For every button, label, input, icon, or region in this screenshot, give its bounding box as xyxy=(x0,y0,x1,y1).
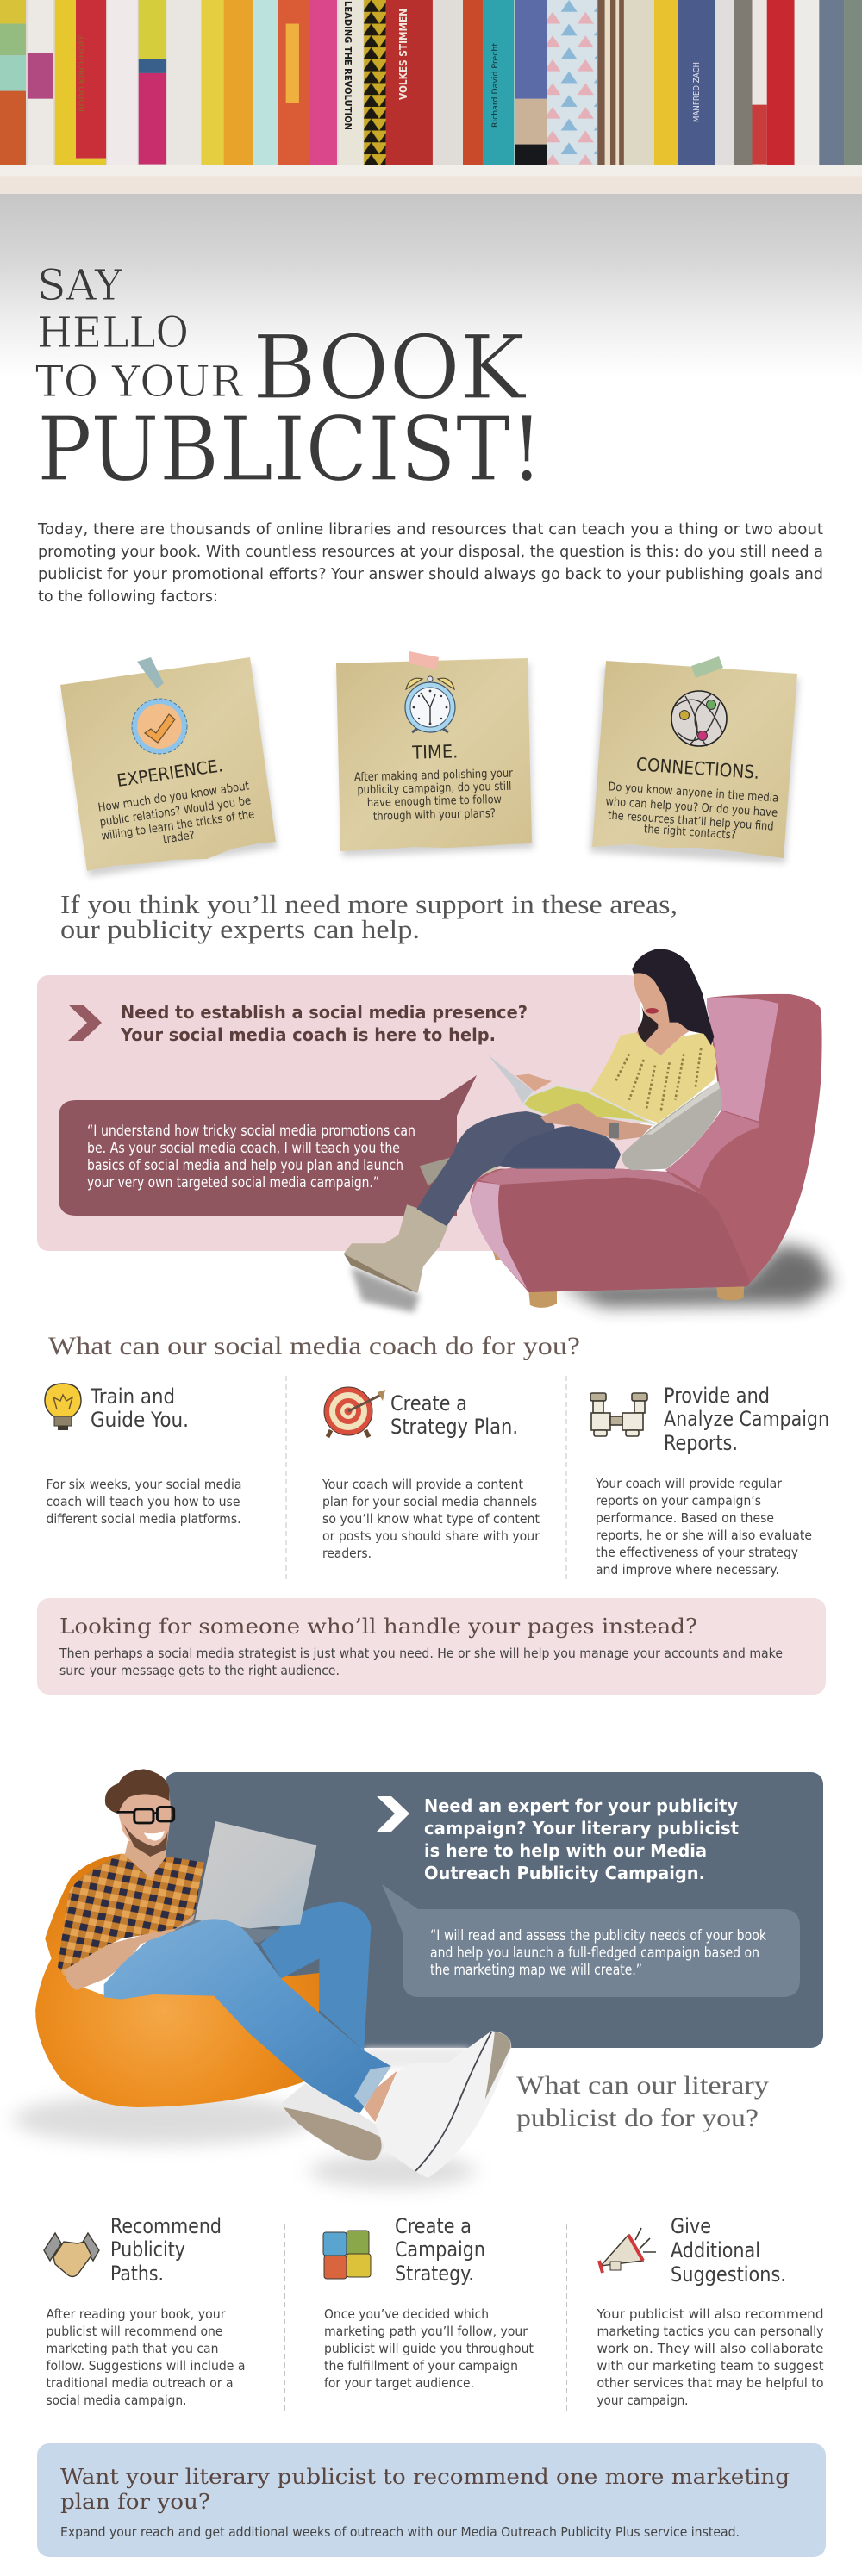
body: Your coach will provide a content xyxy=(322,1477,523,1492)
coach heading: Your social media coach is here to help. xyxy=(120,1024,496,1045)
bookshelf photo banner: MANFRED ZACH xyxy=(692,62,702,122)
time text xyxy=(354,741,513,824)
section heading: literary publicist: publicist do for you? xyxy=(516,2104,759,2132)
bubble quote: the marketing map we will create.” xyxy=(430,1962,642,1978)
bookshelf photo banner xyxy=(0,0,862,194)
item: create a strategy plan xyxy=(322,1387,540,1561)
chair body xyxy=(470,994,822,1292)
connections text: Do you know anyone in the media xyxy=(608,780,779,806)
heading xyxy=(671,2214,786,2287)
bubble quote: your very own targeted social media campaign.” xyxy=(87,1174,379,1191)
bubble quote xyxy=(87,1123,415,1191)
heading: Additional xyxy=(671,2238,760,2262)
title xyxy=(35,260,543,501)
chevron icon xyxy=(68,1005,102,1041)
body: publicist will guide you throughout xyxy=(324,2341,534,2356)
callout: social media strategist: sure your message gets to the right audience. xyxy=(59,1663,340,1678)
heading: Suggestions. xyxy=(671,2262,786,2287)
time text: publicity campaign, do you still xyxy=(357,780,512,797)
item: train and guide xyxy=(45,1384,241,1527)
body: publicist will recommend one xyxy=(47,2324,222,2339)
neck xyxy=(636,1017,690,1055)
bookshelf photo banner: BODO KIRCHHOFF xyxy=(78,34,87,112)
chair feet xyxy=(493,1251,502,1260)
heading xyxy=(110,2214,222,2286)
jeans xyxy=(416,1111,621,1226)
heading xyxy=(390,1391,518,1439)
body: so you’ll know what type of content xyxy=(322,1511,540,1527)
speech bubble xyxy=(382,1884,800,1997)
body: After reading your book, your xyxy=(47,2306,226,2322)
body: the effectiveness of your strategy xyxy=(596,1545,798,1560)
floor shadows xyxy=(13,2094,313,2145)
heading: Recommend xyxy=(110,2214,222,2238)
boot xyxy=(344,1204,448,1293)
experience text: willing to learn the tricks of the xyxy=(101,807,255,843)
heading: Train and xyxy=(90,1384,175,1409)
icon: light bulb xyxy=(45,1384,81,1430)
tape: blue xyxy=(137,657,164,688)
speech bubble xyxy=(59,1075,477,1216)
far leg xyxy=(260,1902,371,2050)
bubble quote: basics of social media and help you plan and launch xyxy=(87,1157,403,1173)
experience text: public relations? Would you be xyxy=(99,793,252,830)
far shoe xyxy=(281,2083,384,2161)
body xyxy=(597,2306,824,2408)
beanbag xyxy=(35,1854,319,2107)
title: SAY xyxy=(37,260,123,310)
body: marketing path that you can xyxy=(47,2341,219,2356)
body: readers. xyxy=(322,1546,372,1561)
time text: TIME. xyxy=(411,741,459,763)
coach heading xyxy=(120,1002,528,1045)
far boot xyxy=(420,1157,451,1186)
section heading: social media coach: What can our social media coach do for you? xyxy=(48,1332,580,1360)
heading: Create a xyxy=(390,1391,467,1416)
heading: Paths. xyxy=(110,2262,164,2286)
body: reports, he or she will also evaluate xyxy=(596,1528,812,1543)
heading: Reports. xyxy=(664,1431,738,1455)
intro paragraph: promoting your book. With countless resources at your disposal, the question is this: do you still need a xyxy=(38,544,823,561)
experience text xyxy=(97,755,255,847)
publicist heading: is here to help with our Media xyxy=(424,1840,707,1861)
body xyxy=(47,1477,241,1527)
callout: media outreach publicity plus xyxy=(37,2443,826,2557)
intro paragraph: publicist for your promotional efforts? Your answer should always go back to your publishing goals and xyxy=(38,566,823,583)
column dividers xyxy=(284,1376,567,2414)
body: or posts you should share with your xyxy=(322,1528,540,1544)
body: For six weeks, your social media xyxy=(47,1477,241,1492)
body: Your coach will provide regular xyxy=(595,1476,783,1491)
body: Your publicist will also recommend xyxy=(597,2306,824,2322)
body: other services that may be helpful to xyxy=(597,2375,824,2391)
body: reports on your campaign’s xyxy=(596,1493,761,1509)
support statement: our publicity experts can help. xyxy=(60,914,420,944)
pillow xyxy=(622,1081,722,1170)
callout: social media strategist: Then perhaps a social media strategist is just what you need. He or she will help you manage your accounts and make xyxy=(59,1646,783,1661)
illustration: woman reading on pink armchair xyxy=(344,949,834,1312)
section heading: literary publicist xyxy=(516,2071,769,2132)
item: recommend publicity paths xyxy=(44,2214,245,2408)
callout: media outreach publicity plus: Want your literary publicist to recommend one more marketing xyxy=(60,2465,790,2489)
icon: handshake xyxy=(44,2233,99,2276)
heading: Strategy. xyxy=(395,2262,474,2286)
title: HELLO xyxy=(37,308,189,358)
heading: Guide You. xyxy=(91,1408,189,1432)
body: performance. Based on these xyxy=(596,1510,774,1526)
sweater xyxy=(590,1032,717,1123)
arm xyxy=(64,1914,195,1990)
heading: Analyze Campaign xyxy=(664,1407,829,1431)
item: provide and analyze campaign reports xyxy=(590,1384,829,1577)
body: Once you’ve decided which xyxy=(324,2306,489,2322)
body: for your target audience. xyxy=(324,2375,474,2391)
bubble quote: “I will read and assess the publicity needs of your book xyxy=(430,1927,766,1944)
body xyxy=(324,2306,534,2391)
heading: Publicity xyxy=(110,2237,185,2262)
body: with our marketing team to suggest xyxy=(597,2358,824,2374)
body: and improve where necessary. xyxy=(596,1562,779,1577)
bubble quote xyxy=(430,1927,766,1978)
heading: Provide and xyxy=(664,1384,770,1408)
body: work on. They will also collaborate xyxy=(597,2341,824,2356)
section heading: literary publicist: What can our literary xyxy=(516,2071,769,2100)
note: time xyxy=(336,651,534,856)
heading: Create a xyxy=(395,2214,472,2238)
item: create a campaign strategy xyxy=(323,2214,534,2391)
face xyxy=(634,965,670,1024)
body: coach will teach you how to use xyxy=(47,1494,240,1509)
heading xyxy=(395,2214,485,2286)
callout: media outreach publicity plus: Expand your reach and get additional weeks of outreach with our Media Outreach Publicity Plus service instead. xyxy=(60,2524,740,2540)
body: different social media platforms. xyxy=(47,1511,241,1527)
body: the fulfillment of your campaign xyxy=(324,2358,518,2374)
publicist heading: campaign? Your literary publicist xyxy=(424,1818,739,1839)
neck xyxy=(125,1841,166,1878)
body: plan for your social media channels xyxy=(322,1494,537,1509)
item: give additional suggestions xyxy=(597,2214,824,2408)
heading: Campaign xyxy=(395,2237,485,2262)
body: your campaign. xyxy=(597,2392,688,2408)
icon: check badge xyxy=(132,699,187,754)
hand and wrist xyxy=(540,1103,653,1140)
experience text: How much do you know about xyxy=(97,779,250,815)
intro paragraph: Today, there are thousands of online libraries and resources that can teach you a thing or two about xyxy=(37,521,823,538)
title: BOOK xyxy=(253,317,527,420)
icon: puzzle xyxy=(323,2231,371,2279)
time text: have enough time to follow xyxy=(367,793,502,810)
intro paragraph xyxy=(37,521,823,606)
experience text: trade? xyxy=(162,828,196,847)
magazine xyxy=(488,1055,533,1104)
heading xyxy=(664,1384,829,1455)
laptop xyxy=(195,1821,316,1928)
time text: After making and polishing your xyxy=(354,767,513,784)
bubble quote: and help you launch a full-fledged campaign based on xyxy=(430,1944,759,1961)
body: traditional media outreach or a xyxy=(47,2375,233,2391)
intro paragraph: to the following factors: xyxy=(38,588,218,606)
connections text: the right contacts? xyxy=(643,822,736,843)
support statement xyxy=(60,889,678,944)
connections text: who can help you? Or do you have xyxy=(605,794,778,820)
connections text: CONNECTIONS. xyxy=(635,754,760,783)
panel: literary publicist xyxy=(165,1772,823,2048)
near leg xyxy=(104,1919,391,2117)
body: follow. Suggestions will include a xyxy=(47,2358,245,2374)
body: marketing path you’ll follow, your xyxy=(324,2324,528,2339)
bubble quote: “I understand how tricky social media promotions can xyxy=(87,1123,415,1139)
near shoe xyxy=(375,2031,511,2178)
time text: through with your plans? xyxy=(373,806,496,824)
illustration: man with laptop on orange beanbag xyxy=(13,1769,511,2188)
icon: megaphone xyxy=(599,2228,656,2273)
experience text: EXPERIENCE. xyxy=(116,755,224,791)
head xyxy=(118,1790,171,1857)
wall background gradient xyxy=(0,194,862,379)
icon: alarm clock xyxy=(405,676,455,732)
chevron icon xyxy=(377,1796,409,1832)
chair shadow xyxy=(558,1243,834,1307)
note: connections xyxy=(590,656,799,863)
icon: binoculars xyxy=(590,1393,647,1436)
title: TO YOUR xyxy=(35,357,243,407)
title: PUBLICIST! xyxy=(37,398,543,501)
bubble quote: be. As your social media coach, I will teach you the xyxy=(87,1140,400,1156)
panel: social media coach xyxy=(37,975,640,1251)
icon: network globe xyxy=(671,691,727,746)
publicist heading: Need an expert for your publicity xyxy=(424,1795,738,1816)
body: social media campaign. xyxy=(47,2392,186,2408)
body: marketing tactics you can personally xyxy=(597,2324,824,2339)
callout: social media strategist xyxy=(37,1598,826,1695)
body xyxy=(595,1476,812,1577)
callout: social media strategist: Looking for someone who’ll handle your pages instead? xyxy=(59,1615,697,1639)
coach heading: Need to establish a social media presence? xyxy=(121,1002,528,1023)
note: experience xyxy=(60,657,278,877)
connections text: the resources that’ll help you find xyxy=(607,808,774,834)
connections text xyxy=(605,754,779,843)
heading: Strategy Plan. xyxy=(390,1415,518,1439)
shirt xyxy=(58,1854,204,1984)
icon: target with arrow xyxy=(324,1387,385,1437)
body xyxy=(47,2306,245,2408)
heading xyxy=(90,1384,189,1432)
heading: Give xyxy=(671,2214,711,2238)
support statement: If you think you’ll need more support in these areas, xyxy=(60,889,678,919)
bookshelf photo banner: Richard David Precht xyxy=(491,43,500,128)
publicist heading: Outreach Publicity Campaign. xyxy=(424,1863,705,1883)
callout: media outreach publicity plus: plan for you? xyxy=(60,2490,210,2514)
bookshelf photo banner: LEADING THE REVOLUTION xyxy=(342,1,353,130)
tape: green xyxy=(691,656,723,678)
body xyxy=(322,1477,540,1561)
hair xyxy=(632,949,714,1045)
publicist heading xyxy=(424,1795,739,1883)
tape: pink xyxy=(409,651,439,669)
